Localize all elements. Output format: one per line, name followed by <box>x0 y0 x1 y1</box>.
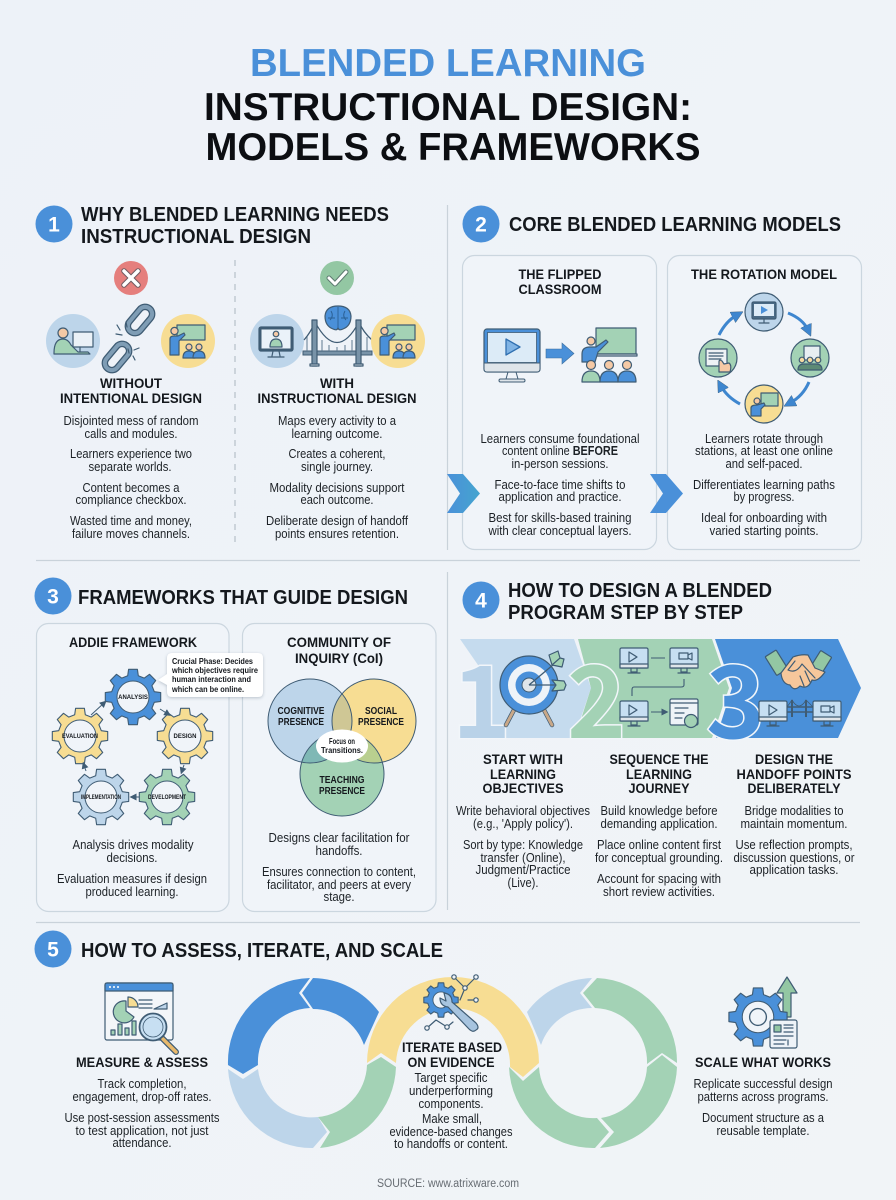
text: iterate based on evidence: Make small, <box>422 1112 482 1126</box>
text: with list: single journey. <box>301 460 373 474</box>
step 3 text: Bridge modalities to <box>744 804 844 818</box>
step 3 text: maintain momentum. <box>740 817 848 831</box>
text: without list: Learners experience two <box>70 447 192 461</box>
heading section 4: PROGRAM STEP BY STEP <box>508 601 743 624</box>
text: rotation model notes: Learners rotate through <box>705 432 823 446</box>
text: without list: Content becomes a <box>82 481 180 495</box>
text: community of inquiry notes <box>262 831 416 904</box>
icon: analytics dashboard <box>105 983 176 1052</box>
step 1 arrow <box>452 622 591 767</box>
step 1 text: transfer (Online), <box>480 851 566 865</box>
diagram: ADDIE gears <box>52 669 213 825</box>
icon: gear growth and template <box>729 977 797 1048</box>
heading section 1: WHY BLENDED LEARNING NEEDS <box>81 203 389 226</box>
heading section 1 <box>81 203 389 248</box>
number badge 5: 5 <box>47 938 59 962</box>
heading: design the handoff points deliberately: DESIGN THE <box>755 751 833 767</box>
heading section 2: CORE BLENDED LEARNING MODELS <box>509 213 841 236</box>
arrow: chevron flipped to rotation <box>650 474 683 513</box>
number badge 1: 1 <box>48 214 60 236</box>
text: flipped classroom notes: Best for skills-based training <box>488 511 632 525</box>
step 2 text: Build knowledge before <box>600 804 718 818</box>
source footer: SOURCE: www.atrixware.com <box>377 1178 519 1190</box>
text: iterate based on evidence: ITERATE BASED <box>402 1039 502 1055</box>
step 3 text: application tasks. <box>750 863 838 877</box>
text: rotation model notes <box>693 432 835 538</box>
panel: section 2 core models <box>447 206 862 550</box>
heading: rotation model: THE ROTATION MODEL <box>691 266 837 282</box>
heading section 5: HOW TO ASSESS, ITERATE, AND SCALE <box>81 939 443 962</box>
icon: broken chain <box>102 304 155 373</box>
labels: presences: PRESENCE <box>358 716 404 728</box>
title <box>204 42 700 169</box>
step 2 arrow <box>567 622 729 767</box>
gear: analysis: ANALYSIS <box>118 695 148 701</box>
text: flipped classroom notes: Face-to-face time shifts to <box>494 478 626 492</box>
step 1 text: Sort by type: Knowledge <box>463 838 583 852</box>
gear: analysis <box>105 669 161 725</box>
heading: design the handoff points deliberately: HANDOFF POINTS <box>736 766 852 782</box>
step 1 text: (e.g., 'Apply policy'). <box>473 817 573 831</box>
text: iterate based on evidence: components. <box>418 1097 484 1111</box>
step 2 arrow: 2 <box>567 622 626 767</box>
text: rotation model notes: varied starting points. <box>710 524 818 538</box>
heading: sequence the learning journey: SEQUENCE THE <box>610 751 708 767</box>
step 1 text: Judgment/Practice <box>476 863 570 877</box>
labels: presences: PRESENCE <box>319 785 365 797</box>
icon: video monitor <box>484 329 540 382</box>
heading: community of inquiry: COMMUNITY OF <box>287 634 391 650</box>
text: flipped classroom notes: application and practice. <box>498 490 622 504</box>
heading: flipped classroom <box>518 266 602 297</box>
text: with list <box>266 414 408 541</box>
number badge 5 <box>34 930 72 968</box>
gear: evaluation: EVALUATION <box>62 734 98 740</box>
step 3 text: discussion questions, or <box>734 851 854 865</box>
number badge 2: 2 <box>475 214 487 236</box>
number badge 4 <box>462 582 500 618</box>
arrow: online to classroom <box>546 343 574 364</box>
text: without list: compliance checkbox. <box>76 493 186 507</box>
text: iterate based on evidence <box>390 1039 512 1151</box>
heading: start with learning objectives <box>482 751 564 796</box>
heading: start with learning objectives: START WITH <box>483 751 563 767</box>
labels: presences <box>278 705 404 797</box>
icon: learner at computer <box>46 314 100 368</box>
number badge 1 <box>36 206 72 242</box>
text: flipped classroom notes: Learners consume foundational <box>480 432 640 446</box>
icon: bridge and brain <box>303 306 372 366</box>
heading: without intentional design: WITHOUT <box>100 375 162 391</box>
text: measure and assess <box>64 1054 220 1150</box>
number badge 3: 3 <box>47 586 59 608</box>
labels: presences: COGNITIVE <box>278 705 324 717</box>
text: ADDIE notes: Evaluation measures if design <box>57 872 207 886</box>
text: measure and assess: Use post-session assessments <box>64 1111 220 1125</box>
gear: design <box>157 708 213 764</box>
text: with list: each outcome. <box>300 493 374 507</box>
labels: presences: SOCIAL <box>365 705 397 717</box>
text: iterate based on evidence: ON EVIDENCE <box>408 1054 494 1070</box>
heading: with instructional design: WITH <box>320 375 354 391</box>
heading section 4: HOW TO DESIGN A BLENDED <box>508 579 772 602</box>
heading: sequence the learning journey <box>610 751 708 796</box>
number badge 4: 4 <box>475 590 487 612</box>
text: scale what works: Document structure as a <box>702 1111 824 1125</box>
text: flipped classroom notes: in-person sessions. <box>512 457 608 471</box>
heading: ADDIE: ADDIE FRAMEWORK <box>69 634 197 650</box>
text: community of inquiry notes: Ensures connection to content, <box>262 865 416 879</box>
panel: section 5 assess iterate scale <box>34 930 832 1151</box>
text: ADDIE notes <box>57 838 207 899</box>
text: ADDIE notes: decisions. <box>106 851 158 865</box>
text: rotation model notes: by progress. <box>734 490 794 504</box>
text: community of inquiry notes: Designs clear facilitation for <box>268 831 410 845</box>
heading section 3: FRAMEWORKS THAT GUIDE DESIGN <box>78 586 408 609</box>
text: without list: Wasted time and money, <box>70 514 192 528</box>
icon: bridge between modalities <box>759 700 841 726</box>
step 3 text: Use reflection prompts, <box>736 838 852 852</box>
step 1 text: (Live). <box>508 876 538 890</box>
label: focus on transitions: Transitions. <box>321 745 363 755</box>
heading: sequence the learning journey: LEARNING <box>626 766 692 782</box>
icon: target and arrows <box>500 651 566 725</box>
step 2 text: Account for spacing with <box>597 872 721 886</box>
gear: evaluation <box>52 708 108 764</box>
text: community of inquiry notes: handoffs. <box>316 844 362 858</box>
text: rotation model notes: and self-paced. <box>726 457 802 471</box>
step 1 text: Write behavioral objectives <box>456 804 590 818</box>
heading section 1: INSTRUCTIONAL DESIGN <box>81 225 311 248</box>
step 1 arrow: 1 <box>452 622 511 767</box>
icon: learning sequence flow <box>620 648 698 728</box>
text: scale what works <box>694 1054 832 1138</box>
gear: development <box>139 769 195 825</box>
text: rotation model notes: Ideal for onboarding with <box>701 511 827 525</box>
panel: section 3 frameworks <box>34 578 436 912</box>
chart: infinity cycle rings <box>228 977 677 1148</box>
text: without list: calls and modules. <box>84 427 178 441</box>
text: iterate based on evidence: evidence-based changes <box>390 1125 512 1139</box>
step 2 text: demanding application. <box>600 817 718 831</box>
heading: with instructional design: INSTRUCTIONAL DESIGN <box>258 390 416 406</box>
text: measure and assess: engagement, drop-off rates. <box>72 1090 212 1104</box>
text: measure and assess: Track completion, <box>98 1077 186 1091</box>
text: without list: Disjointed mess of random <box>64 414 198 428</box>
heading: flipped classroom: THE FLIPPED <box>518 266 602 282</box>
panel: section 1 why instructional design <box>36 203 425 545</box>
chart: venn diagram <box>268 679 416 816</box>
callout: crucial phase: Crucial Phase: Decides <box>172 657 254 666</box>
callout: crucial phase <box>158 653 263 697</box>
icon: red cross <box>114 261 148 295</box>
text: community of inquiry notes: facilitator, and peers at every <box>267 878 412 892</box>
text: iterate based on evidence: underperforming <box>409 1084 493 1098</box>
text: scale what works: patterns across programs. <box>698 1090 828 1104</box>
card: rotation model <box>668 256 862 550</box>
step 2 text <box>595 751 723 899</box>
gear: implementation <box>73 769 129 825</box>
callout: crucial phase: which can be online. <box>171 685 244 694</box>
text: ADDIE notes: produced learning. <box>86 885 178 899</box>
card: flipped classroom <box>462 256 656 550</box>
callout: crucial phase: human interaction and <box>172 675 251 684</box>
text: rotation model notes: stations, at least one online <box>695 444 833 458</box>
labels: presences: PRESENCE <box>278 716 324 728</box>
number badge 3 <box>34 578 72 614</box>
text: scale what works: Replicate successful design <box>694 1077 832 1091</box>
label: focus on transitions <box>316 730 368 762</box>
arrow: chevron section 1 to 2 <box>447 474 480 513</box>
text: without list: failure moves channels. <box>72 527 190 541</box>
gear: development: DEVELOPMENT <box>148 795 186 801</box>
text: measure and assess: MEASURE & ASSESS <box>76 1054 208 1070</box>
text: without list: separate worlds. <box>88 460 172 474</box>
step 3 arrow: 3 <box>706 622 765 767</box>
text: without list <box>64 414 198 541</box>
text: scale what works: reusable template. <box>716 1124 810 1138</box>
text: flipped classroom notes: content online BEFORE <box>502 444 618 458</box>
icon: green check <box>320 261 354 295</box>
text: with list: Maps every activity to a <box>278 414 396 428</box>
gear: implementation: IMPLEMENTATION <box>81 795 121 801</box>
heading: sequence the learning journey: JOURNEY <box>628 780 690 796</box>
text: iterate based on evidence: to handoffs or content. <box>394 1137 508 1151</box>
heading: with instructional design <box>258 375 416 406</box>
icon: wrench and gear <box>424 975 478 1031</box>
icon: teacher and students <box>582 328 637 382</box>
heading: community of inquiry: INQUIRY (CoI) <box>295 650 383 666</box>
title: MODELS & FRAMEWORKS <box>206 126 700 169</box>
text: community of inquiry notes: stage. <box>324 890 354 904</box>
card: ADDIE framework <box>36 624 229 912</box>
text: rotation model notes: Differentiates learning paths <box>693 478 835 492</box>
icon: classroom teacher <box>371 314 425 368</box>
step 2 text: short review activities. <box>603 885 715 899</box>
text: flipped classroom notes <box>480 432 640 538</box>
heading: start with learning objectives: OBJECTIVES <box>482 780 564 796</box>
text: scale what works: SCALE WHAT WORKS <box>695 1054 831 1070</box>
card: community of inquiry <box>242 624 436 912</box>
text: with list: Modality decisions support <box>270 481 405 495</box>
diagram: rotation cycle <box>699 293 829 423</box>
text: measure and assess: attendance. <box>112 1136 172 1150</box>
text: flipped classroom notes: with clear conceptual layers. <box>488 524 632 538</box>
text: iterate based on evidence: Target specific <box>414 1071 488 1085</box>
heading: without intentional design: INTENTIONAL DESIGN <box>60 390 202 406</box>
text: ADDIE notes: Analysis drives modality <box>72 838 194 852</box>
icon: classroom teacher <box>161 314 215 368</box>
gear: design: DESIGN <box>173 734 197 740</box>
heading: design the handoff points deliberately <box>736 751 852 796</box>
callout: crucial phase: which objectives require <box>171 666 259 675</box>
heading: without intentional design <box>60 375 202 406</box>
number badge 2 <box>462 206 500 242</box>
heading section 4 <box>508 579 772 624</box>
label: focus on transitions: Focus on <box>329 736 355 746</box>
step 3 text <box>734 751 854 877</box>
text: with list: learning outcome. <box>292 427 382 441</box>
step 3 arrow <box>706 622 861 767</box>
step 2 text: Place online content first <box>597 838 721 852</box>
title: BLENDED LEARNING <box>250 42 646 85</box>
text: with list: Deliberate design of handoff <box>266 514 408 528</box>
step 2 text: for conceptual grounding. <box>595 851 723 865</box>
text: with list: Creates a coherent, <box>288 447 386 461</box>
chart: step arrows <box>452 622 861 767</box>
icon: handshake <box>765 650 832 689</box>
text: measure and assess: to test application, not just <box>76 1124 209 1138</box>
heading: community of inquiry <box>287 634 391 666</box>
heading: flipped classroom: CLASSROOM <box>518 281 602 297</box>
title: INSTRUCTIONAL DESIGN: <box>204 86 692 129</box>
icon: online session monitor <box>250 314 304 368</box>
panel: section 4 step by step <box>452 579 861 899</box>
heading: design the handoff points deliberately: DELIBERATELY <box>748 780 841 796</box>
labels: presences: TEACHING <box>320 774 364 786</box>
text: with list: points ensures retention. <box>275 527 399 541</box>
heading: start with learning objectives: LEARNING <box>490 766 556 782</box>
step 1 text <box>456 751 590 890</box>
